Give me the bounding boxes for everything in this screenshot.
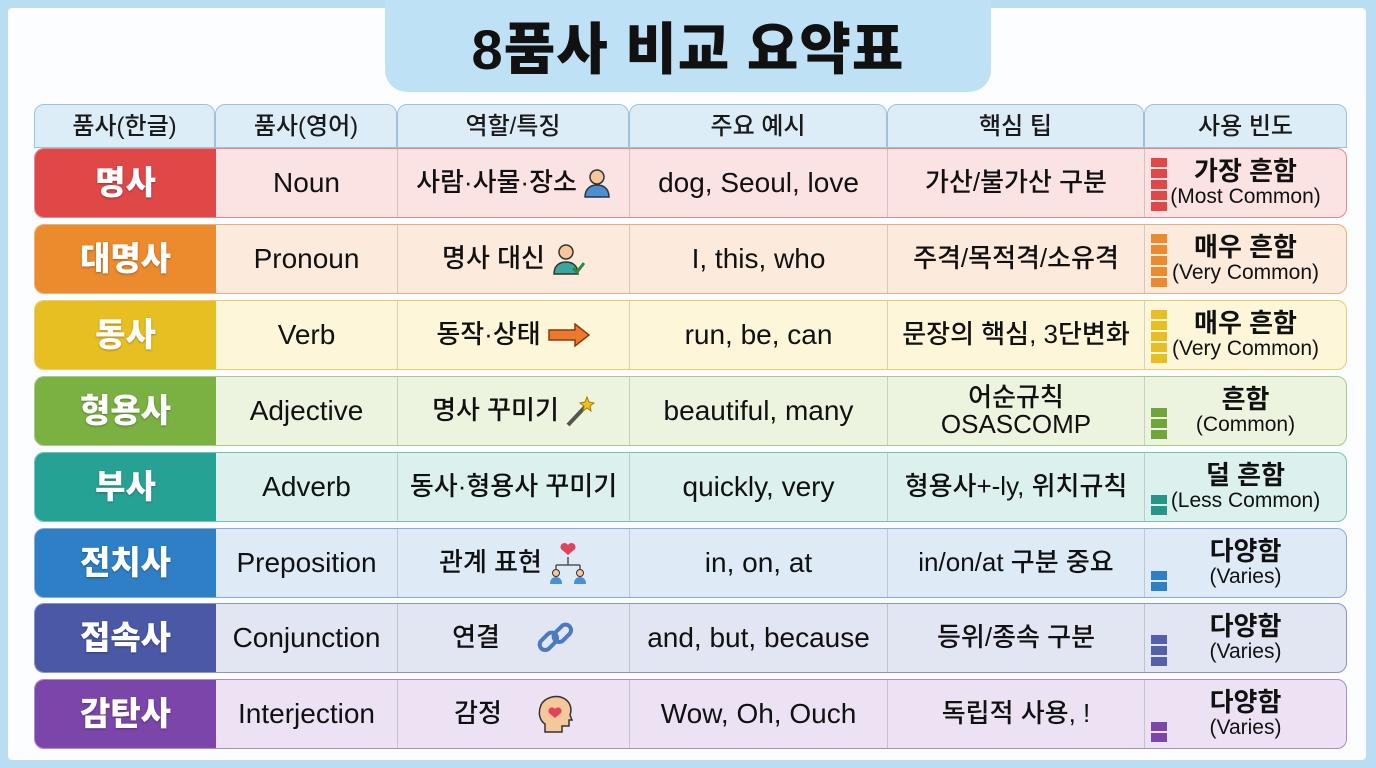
title — [385, 0, 991, 92]
row: noun: Noun — [273, 167, 340, 198]
row: noun: 명사 — [95, 164, 156, 201]
header row: 품사(한글) — [72, 113, 177, 140]
row: adverb: 동사·형용사 꾸미기 — [410, 471, 617, 501]
row: pronoun: (Very Common) — [1172, 261, 1319, 284]
row: preposition: 전치사 — [80, 544, 171, 581]
row: verb: 매우 흔함 — [1194, 308, 1297, 338]
row: pronoun: 대명사 — [80, 240, 171, 277]
row: verb: 문장의 핵심, 3단변화 — [902, 319, 1130, 349]
row: interjection: 감정 — [454, 698, 502, 728]
header row: 품사(영어) — [254, 113, 358, 140]
row: conjunction: Conjunction — [233, 622, 380, 653]
row: noun: 가장 흔함 — [1194, 156, 1297, 186]
row: preposition: (Varies) — [1210, 565, 1281, 588]
row: conjunction: 접속사 — [80, 619, 171, 656]
row: adjective: Adjective — [250, 395, 363, 426]
row: adjective: beautiful, many — [664, 395, 853, 426]
row: preposition: 다양함 — [1210, 536, 1281, 566]
header row: 주요 예시 — [710, 113, 806, 140]
row: conjunction — [34, 603, 1347, 673]
row: adverb — [34, 452, 1347, 522]
title: 8품사 비교 요약표 — [472, 18, 904, 81]
row: verb: 동사 — [95, 316, 156, 353]
row: pronoun: 매우 흔함 — [1194, 232, 1297, 262]
row: conjunction: (Varies) — [1210, 640, 1281, 663]
row: adjective: 어순규칙 — [968, 382, 1064, 412]
row: verb: run, be, can — [685, 319, 832, 350]
row: adjective: 형용사 — [80, 392, 171, 429]
row: preposition: in, on, at — [705, 547, 812, 578]
row: conjunction: 연결 — [452, 622, 500, 652]
row: interjection: 다양함 — [1210, 687, 1281, 717]
row: interjection — [34, 679, 1347, 749]
row: adverb: Adverb — [262, 471, 351, 502]
row: adjective: OSASCOMP — [941, 409, 1091, 439]
row: preposition: 관계 표현 — [439, 547, 542, 577]
header row — [34, 104, 1347, 148]
row: interjection: 감탄사 — [80, 695, 171, 732]
header row: 역할/특징 — [466, 113, 560, 140]
row: preposition: Preposition — [236, 547, 377, 578]
row: interjection: 독립적 사용, ! — [942, 698, 1090, 728]
row: interjection: Wow, Oh, Ouch — [661, 698, 856, 729]
row: verb — [34, 300, 1347, 370]
row: adjective: 흔함 — [1222, 384, 1269, 414]
row: verb: Verb — [278, 319, 335, 350]
row: conjunction: 등위/종속 구분 — [937, 622, 1095, 652]
row: verb: (Very Common) — [1172, 337, 1319, 360]
row: adverb: 덜 흔함 — [1206, 460, 1285, 490]
row: noun — [34, 148, 1347, 218]
row: adverb: 부사 — [95, 468, 156, 505]
row: interjection: Interjection — [238, 698, 375, 729]
row: pronoun: Pronoun — [254, 243, 359, 274]
row: pronoun — [34, 224, 1347, 294]
row: adjective — [34, 376, 1347, 446]
row: noun: 가산/불가산 구분 — [925, 167, 1107, 197]
row: pronoun: 명사 대신 — [442, 243, 545, 273]
row: adjective: (Common) — [1196, 413, 1295, 436]
header row: 핵심 팁 — [979, 113, 1052, 140]
row: pronoun: 주격/목적격/소유격 — [913, 243, 1119, 273]
row: adverb: (Less Common) — [1171, 489, 1320, 512]
row: preposition: in/on/at 구분 중요 — [918, 547, 1114, 577]
row: verb: 동작·상태 — [436, 319, 541, 349]
row: adverb: quickly, very — [683, 471, 834, 502]
row: noun: (Most Common) — [1170, 185, 1321, 208]
row: preposition — [34, 528, 1347, 598]
row: noun: 사람·사물·장소 — [416, 167, 577, 197]
header row: 사용 빈도 — [1198, 113, 1293, 140]
row: conjunction: and, but, because — [647, 622, 870, 653]
row: adjective: 명사 꾸미기 — [432, 395, 559, 425]
row: adverb: 형용사+-ly, 위치규칙 — [905, 471, 1127, 501]
row: interjection: (Varies) — [1210, 716, 1281, 739]
row: pronoun: I, this, who — [692, 243, 825, 274]
row: noun: dog, Seoul, love — [658, 167, 859, 198]
row: conjunction: 다양함 — [1210, 611, 1281, 641]
